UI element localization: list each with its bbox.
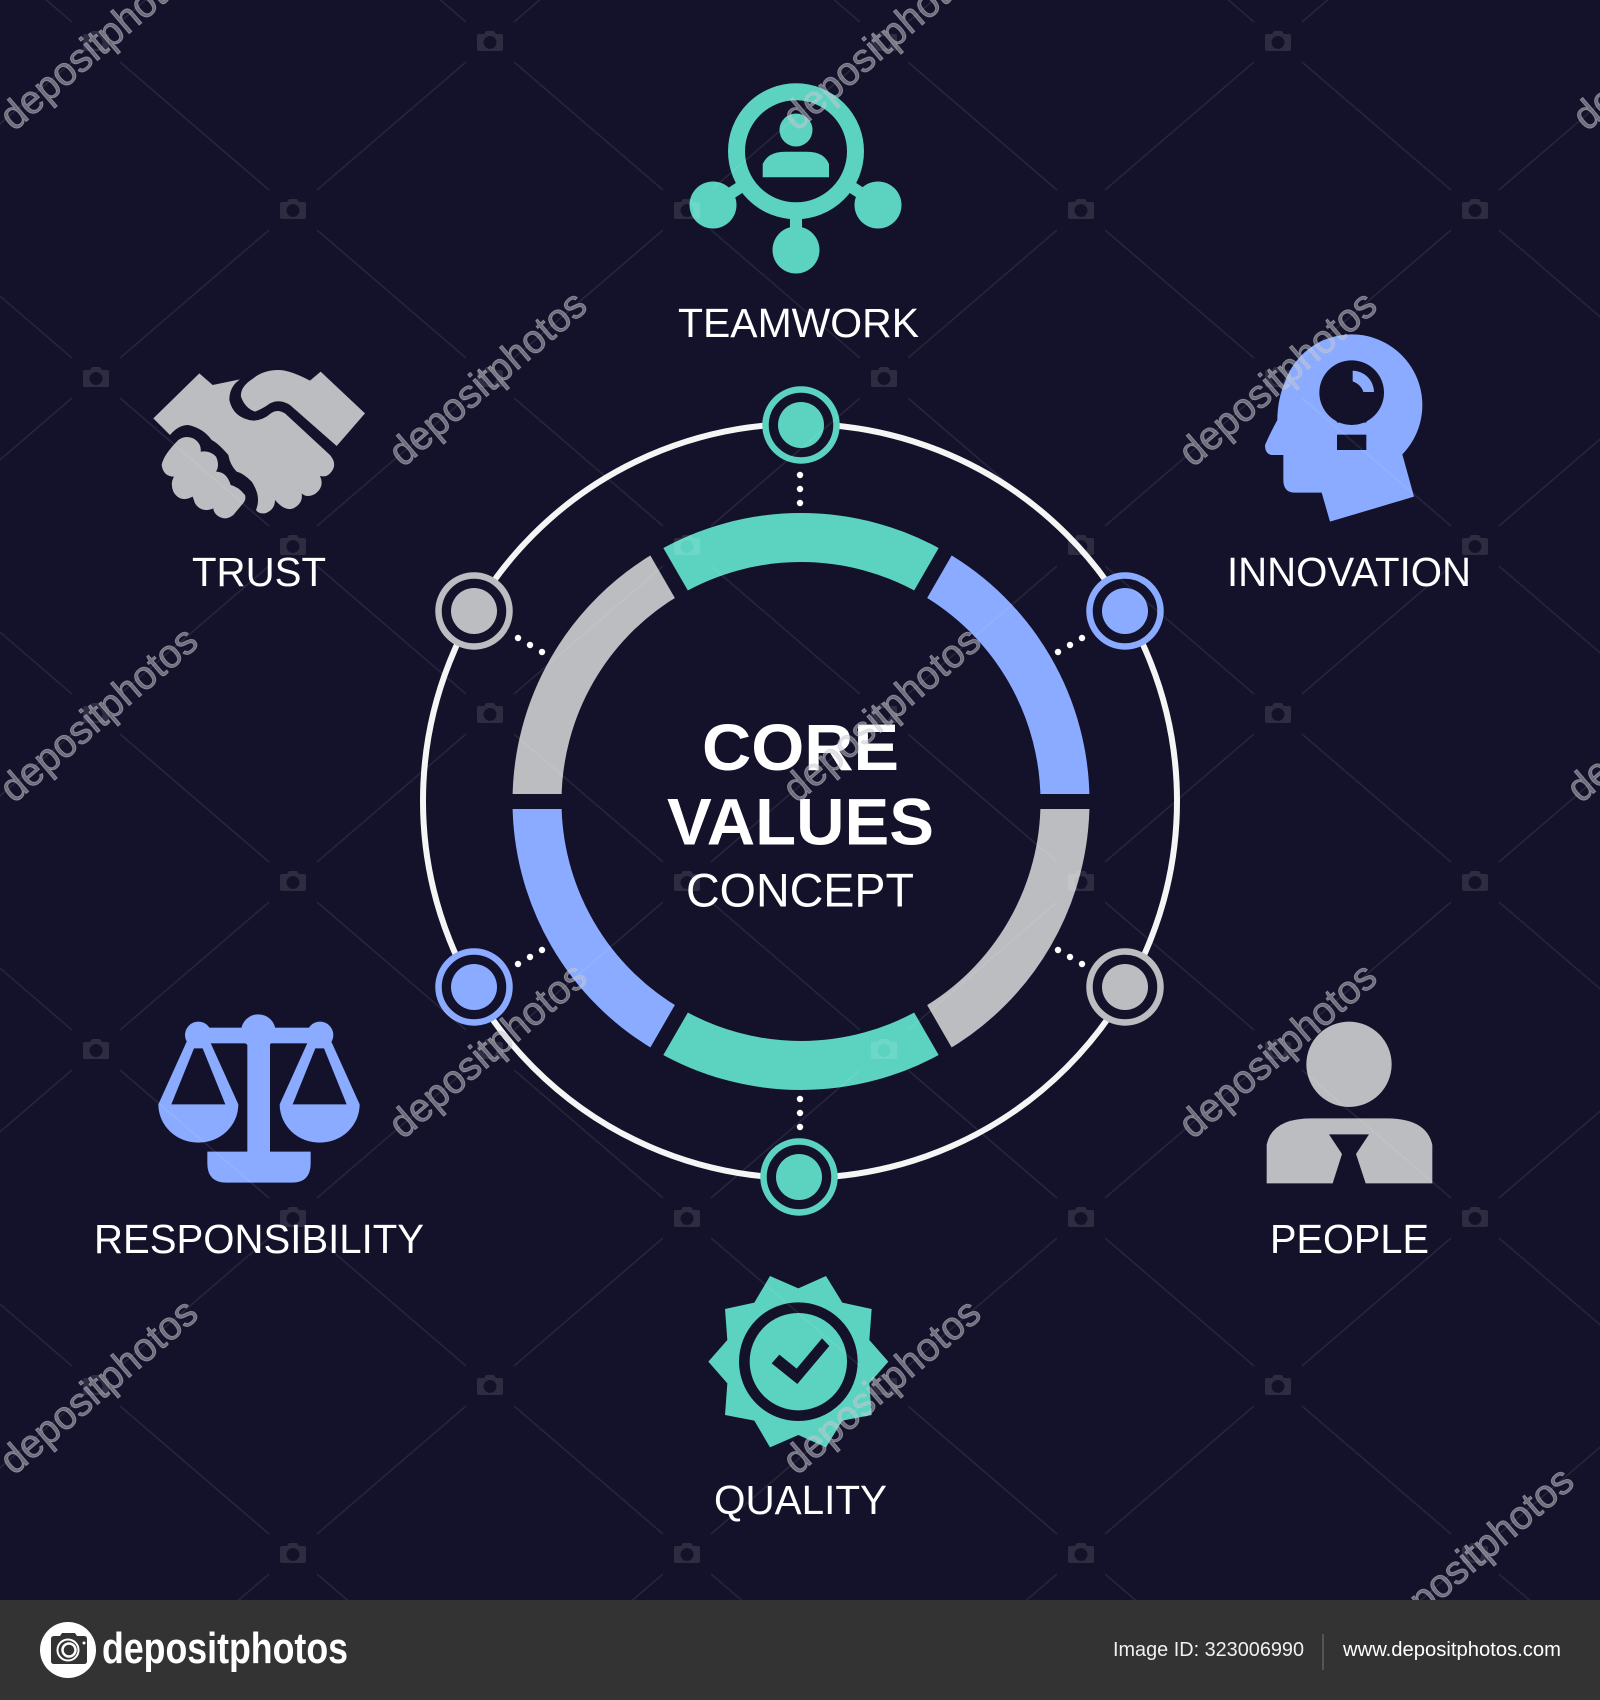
footer logo wordmark: depositphotos — [102, 1624, 348, 1673]
icon: teamwork — [690, 92, 902, 274]
segment: people gray — [933, 802, 1065, 1030]
label: innovation: INNOVATION — [1227, 549, 1471, 595]
watermark: depositphotos text: depositphotos — [774, 618, 989, 811]
segment: quality teal — [669, 1030, 933, 1065]
title: core: CORE — [702, 710, 899, 784]
footer url: www.depositphotos.com — [1342, 1639, 1561, 1661]
watermark: depositphotos text: depositphotos — [380, 282, 595, 475]
node: teamwork — [766, 390, 836, 460]
center title — [667, 710, 934, 916]
watermark: depositphotos text: depositphotos — [774, 1290, 989, 1483]
icon: quality badge — [708, 1276, 888, 1447]
node: responsibility — [438, 952, 510, 1022]
watermark: depositphotos text: depositphotos — [1170, 954, 1385, 1147]
icon: innovation head — [1265, 334, 1422, 522]
label: responsibility: RESPONSIBILITY — [94, 1216, 424, 1262]
label: quality: QUALITY — [714, 1477, 887, 1523]
segment: responsibility blue — [537, 802, 669, 1030]
segment: teamwork teal — [669, 538, 933, 573]
watermark: depositphotos text: depositphotos — [1367, 1458, 1582, 1651]
segment: trust gray — [537, 573, 669, 802]
subtitle: concept: CONCEPT — [686, 864, 914, 916]
label: trust: TRUST — [192, 549, 326, 595]
node: people — [1090, 952, 1160, 1022]
donut chart: six segments — [501, 538, 1101, 1065]
node: innovation — [1090, 576, 1160, 646]
segment: innovation blue — [933, 573, 1065, 802]
watermark: depositphotos text: depositphotos — [380, 954, 595, 1147]
outer ring — [423, 424, 1177, 1178]
node: trust — [438, 576, 510, 646]
label: people: PEOPLE — [1270, 1216, 1429, 1262]
title: values: VALUES — [667, 784, 934, 858]
connector dots — [515, 472, 1085, 1130]
node: quality — [764, 1142, 834, 1212]
icon: responsibility scales — [158, 1014, 360, 1183]
footer bar — [0, 1600, 1600, 1700]
watermark: depositphotos text: depositphotos — [1170, 282, 1385, 475]
icon: people — [1267, 1022, 1432, 1183]
footer image id: Image ID: 323006990 — [1113, 1639, 1304, 1661]
icon: trust handshake — [153, 370, 365, 518]
footer logo mark — [40, 1622, 96, 1678]
label: teamwork: TEAMWORK — [678, 300, 919, 346]
